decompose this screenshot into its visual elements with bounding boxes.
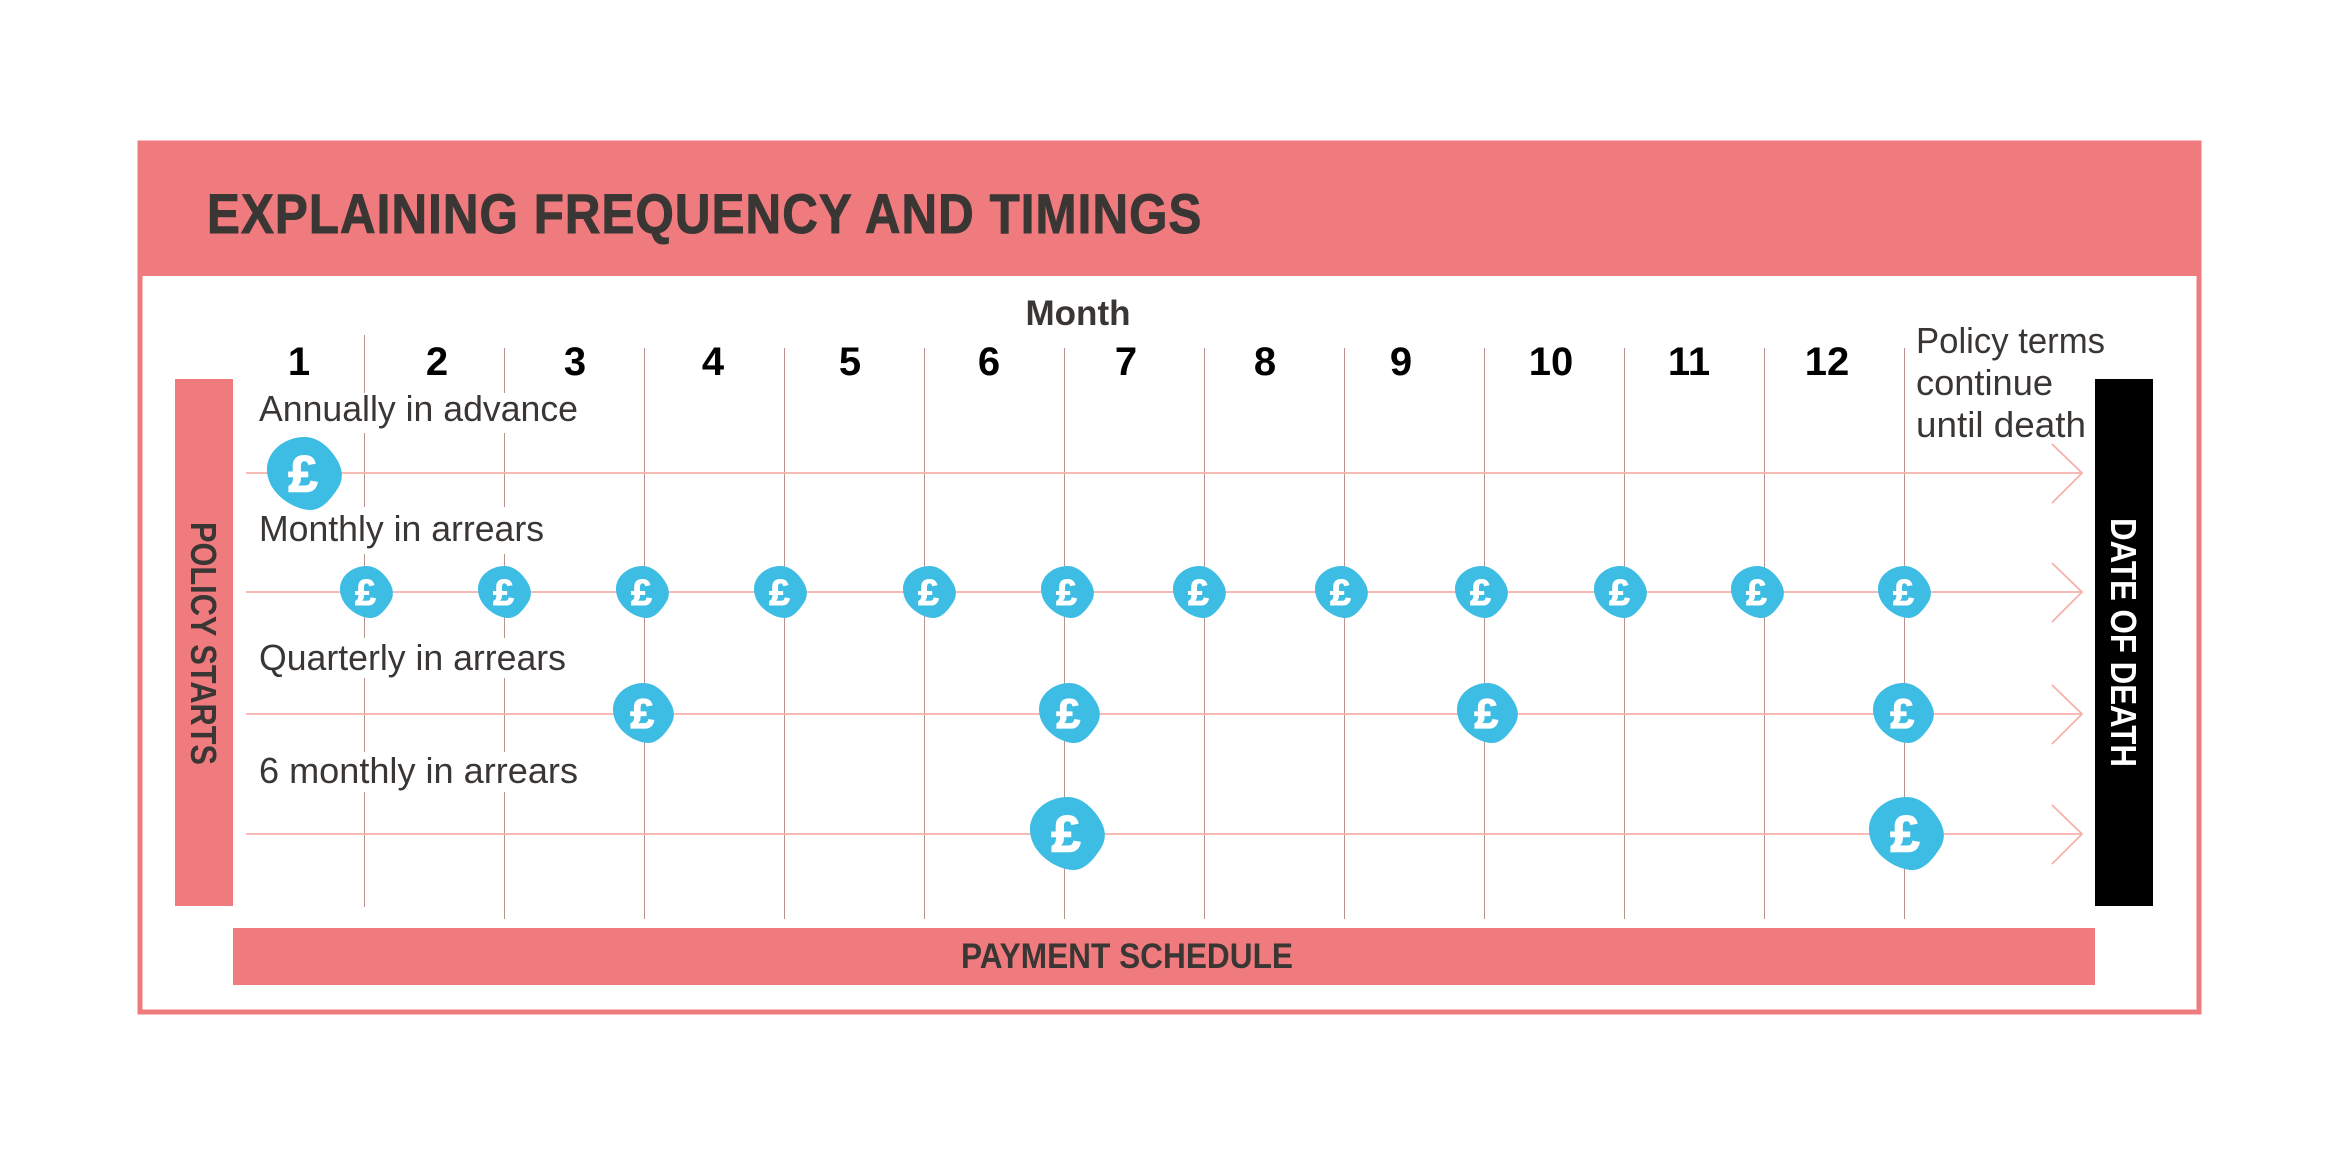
month numbers: 12 [1805, 340, 1849, 384]
month numbers: 6 [978, 340, 1000, 384]
icon: pound coins: £ [1474, 690, 1499, 737]
month numbers: 7 [1115, 340, 1137, 384]
icon: pound coins: £ [1893, 572, 1914, 613]
icon: pound coins: £ [493, 572, 514, 613]
month numbers: 10 [1529, 340, 1573, 384]
icon: pound coins: £ [1746, 572, 1767, 613]
arrows: timelines [246, 444, 2082, 864]
row: quarterly in arrears: Quarterly in arrears [259, 637, 566, 678]
row: monthly in arrears: Monthly in arrears [259, 508, 544, 549]
bar: payment schedule: PAYMENT SCHEDULE [961, 937, 1293, 976]
month numbers: 9 [1390, 340, 1412, 384]
note: policy terms [1916, 320, 2105, 445]
row: monthly in arrears [259, 508, 1931, 618]
icon: pound coins [613, 683, 1934, 743]
icon: pound coin: £ [288, 445, 318, 503]
month numbers: 4 [702, 340, 725, 384]
icon: pound coins: £ [1330, 572, 1351, 613]
month grid lines [364, 335, 1904, 919]
month numbers [288, 340, 1849, 384]
row: annually in advance [259, 388, 578, 510]
note: policy terms: until death [1916, 404, 2086, 445]
title: EXPLAINING FREQUENCY AND TIMINGS [207, 183, 1201, 246]
bar: policy starts: POLICY STARTS [183, 522, 224, 765]
month numbers: 8 [1254, 340, 1276, 384]
icon: pound coins: £ [630, 690, 655, 737]
heading: month: Month [1026, 294, 1130, 333]
header band [138, 141, 2201, 276]
icon: pound coins: £ [1609, 572, 1630, 613]
icon: pound coins [340, 566, 1931, 618]
bar: date of death [2095, 379, 2153, 906]
icon: pound coin [267, 437, 342, 510]
icon: pound coins: £ [631, 572, 652, 613]
bar: policy starts [175, 379, 233, 906]
icon: pound coins: £ [1890, 805, 1920, 863]
icon: pound coins: £ [355, 572, 376, 613]
row: 6 monthly in arrears [259, 750, 1944, 870]
bar: payment schedule [233, 928, 2095, 985]
month numbers: 1 [288, 340, 310, 384]
month numbers: 3 [564, 340, 586, 384]
month numbers: 5 [839, 340, 861, 384]
icon: pound coins: £ [1470, 572, 1491, 613]
icon: pound coins: £ [1056, 572, 1077, 613]
icon: pound coins: £ [1051, 805, 1081, 863]
row: quarterly in arrears [259, 637, 1934, 743]
icon: pound coins [1030, 797, 1944, 870]
icon: pound coins: £ [1056, 690, 1081, 737]
bar: date of death: DATE OF DEATH [2103, 518, 2144, 767]
note: policy terms: Policy terms [1916, 320, 2105, 361]
month numbers: 11 [1668, 340, 1710, 384]
note: policy terms: continue [1916, 362, 2053, 403]
row: 6 monthly in arrears: 6 monthly in arrears [259, 750, 578, 791]
icon: pound coins: £ [1188, 572, 1209, 613]
icon: pound coins: £ [1890, 690, 1915, 737]
icon: pound coins: £ [769, 572, 790, 613]
row: annually in advance: Annually in advance [259, 388, 578, 429]
icon: pound coins: £ [918, 572, 939, 613]
panel: frame [140, 143, 2199, 1012]
month numbers: 2 [426, 340, 448, 384]
